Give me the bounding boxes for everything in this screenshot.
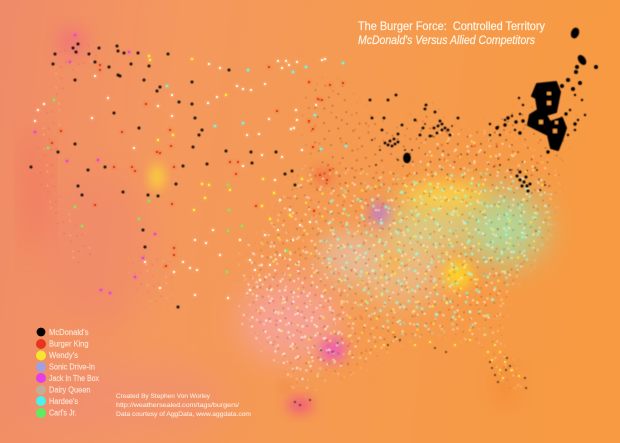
western dots: black (McDonald's) (31, 44, 295, 307)
title: McDonald's Versus Allied Competitors (358, 34, 535, 47)
western dots: green (Carl's Jr.) (48, 100, 287, 272)
western dots: red (Burger King) (52, 65, 343, 266)
legend: Sonic Drive-In (49, 362, 95, 372)
western dots: mint (Hardee's) (167, 63, 346, 149)
Florida and Gulf coast yellow dots (384, 340, 519, 378)
western dots: pale (Dairy Queen and others) (35, 59, 325, 298)
Florida and Gulf coast dots (295, 337, 526, 405)
legend: McDonald's (49, 328, 88, 337)
western dots: yellow (Wendy's) (149, 56, 302, 219)
colour fields: regional territory glows (10, 30, 545, 440)
credits: Created By Stephen Von Worley (116, 393, 211, 400)
credits (116, 393, 251, 418)
legend: Jack In The Box (49, 374, 99, 383)
western dots: magenta (Jack In The Box) (35, 35, 155, 293)
credits: Data courtesy of AggData, www.aggdata.com (116, 411, 251, 418)
legend: Dairy Queen (49, 386, 90, 394)
title: The Burger Force: Controlled Territory (358, 20, 545, 33)
legend: Hardee's (49, 397, 78, 406)
eastern scatter of restaurant dots (38, 45, 577, 397)
McDonald's territory: Michigan, Chicago and Carolina clusters (370, 95, 545, 191)
legend: Burger King (49, 340, 88, 348)
legend: Wendy's (49, 351, 78, 360)
McDonald's territory: northeast black mass (490, 27, 596, 152)
legend (36, 328, 99, 418)
credits: http://weathersealed.com/tags/burgers/ (116, 402, 239, 409)
title (358, 20, 545, 47)
legend: Carl's Jr. (49, 408, 76, 418)
